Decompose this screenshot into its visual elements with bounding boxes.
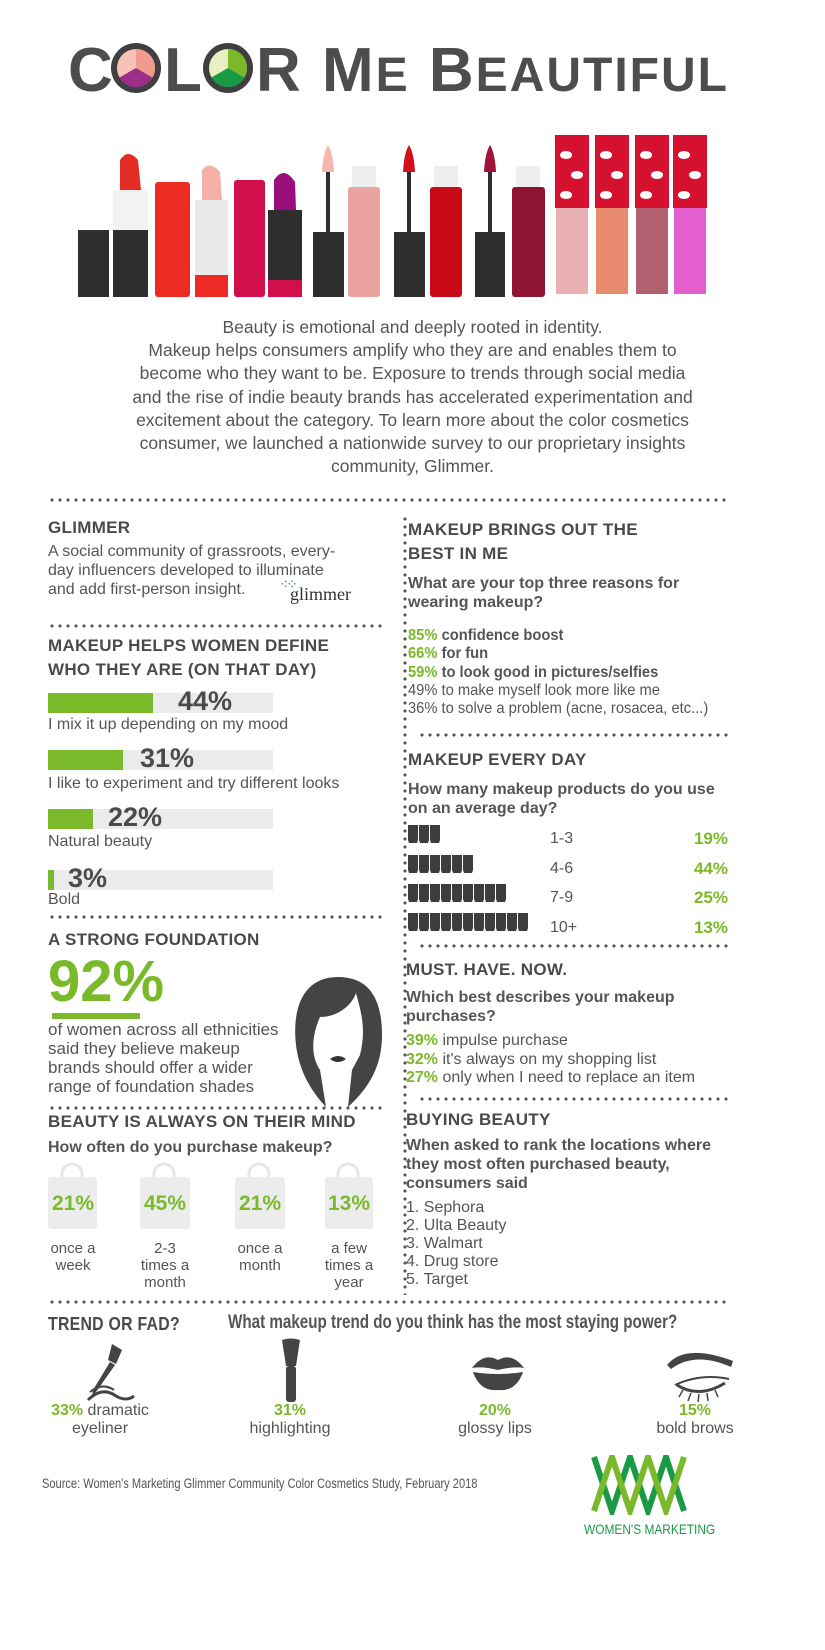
panel: best in me: What are your top three reasons for (408, 575, 679, 592)
panel: buying beauty: 1. Sephora (406, 1199, 484, 1216)
bar chart: 3% (68, 863, 107, 893)
bar chart: 31% (140, 743, 194, 773)
icon: glimmer logo (280, 576, 351, 604)
panel: best in me: 66% for fun (408, 645, 488, 662)
panel: best in me: 36% to solve a problem (acne, rosacea, etc...) (408, 700, 708, 717)
icon: shopping bags with stats: times a (141, 1257, 189, 1274)
chart: products per day: 13% (694, 918, 728, 936)
panel: buying beauty: BUYING BEAUTY (406, 1110, 551, 1129)
icon: eyeliner (87, 1344, 135, 1401)
lipstick illustration (78, 135, 707, 297)
icon: glimmer logo: glimmer (290, 584, 351, 604)
panel: best in me: 59% to look good in pictures/selfies (408, 664, 658, 681)
icon: shopping bags with stats: 21% (239, 1192, 281, 1215)
icon: shopping bags with stats: month (239, 1257, 281, 1274)
panel: strong foundation: 92% (48, 949, 164, 1014)
heading: trend or fad: What makeup trend do you think has the most staying power? (228, 1312, 677, 1333)
panel: define who they are: WHO THEY ARE (ON THAT DAY) (48, 660, 316, 679)
panel: must have now: MUST. HAVE. NOW. (406, 960, 567, 979)
icon: shopping bags with stats: week (55, 1257, 91, 1274)
panel: glimmer: GLIMMER (48, 518, 130, 537)
panel: strong foundation: said they believe makeup (48, 1039, 240, 1058)
icon: shopping bags with stats: a few (331, 1240, 367, 1257)
panel: best in me: wearing makeup? (408, 594, 543, 611)
panel: strong foundation (48, 930, 279, 1096)
panel: strong foundation: brands should offer a wider (48, 1058, 253, 1077)
trend stats: 33% dramatic (51, 1402, 149, 1419)
chart: products per day: 44% (694, 858, 728, 878)
panel: buying beauty: 2. Ulta Beauty (406, 1217, 506, 1234)
panel: makeup every day: MAKEUP EVERY DAY (408, 750, 587, 769)
panel: glimmer: and add first-person insight. (48, 581, 245, 598)
icon: shopping bags with stats: times a (325, 1257, 373, 1274)
logo: women's marketing (584, 1455, 715, 1537)
trend stats (51, 1402, 734, 1437)
icon: shopping bags with stats: 2-3 (154, 1240, 176, 1257)
panel: best in me: 85% confidence boost (408, 627, 563, 644)
panel: glimmer: A social community of grassroots, every- (48, 543, 335, 560)
logo: women's marketing: WOMEN'S MARKETING (584, 1521, 715, 1537)
icon: shopping bags with stats: once a (237, 1240, 283, 1257)
panel: buying beauty: When asked to rank the locations where (406, 1137, 711, 1154)
panel: buying beauty: they most often purchased beauty, (406, 1156, 670, 1173)
panel: must have now: 39% impulse purchase (406, 1032, 568, 1049)
icon: highlighter brush (282, 1338, 300, 1402)
panel: buying beauty: 3. Walmart (406, 1235, 483, 1252)
panel: glimmer (48, 518, 351, 604)
panel: makeup every day (408, 750, 715, 817)
panel: makeup every day: How many makeup products do you use (408, 781, 715, 798)
intro paragraph: community, Glimmer. (331, 456, 494, 476)
source note: Source: Women's Marketing Glimmer Community Color Cosmetics Study, February 2018 (42, 1476, 477, 1491)
icon: woman (295, 977, 382, 1107)
chart: products per day: 4-6 (550, 860, 573, 876)
trend stats: glossy lips (458, 1420, 532, 1437)
panel: beauty on their mind (48, 1112, 356, 1156)
icon: eye with brow (667, 1352, 733, 1402)
intro paragraph: and the rise of indie beauty brands has accelerated experimentation and (132, 387, 693, 407)
trend stats: 15% (679, 1402, 711, 1419)
icon: shopping bags with stats: 13% (328, 1192, 370, 1215)
trend stats: highlighting (250, 1420, 330, 1437)
panel: define who they are (48, 636, 329, 679)
panel: glimmer: day influencers developed to illuminate (48, 562, 324, 579)
icon: shopping bags with stats: year (334, 1274, 364, 1291)
bar chart: Bold (48, 891, 80, 908)
chart: products per day: 7-9 (550, 889, 573, 906)
panel: must have now: purchases? (406, 1008, 496, 1025)
bar chart (48, 686, 339, 908)
panel: must have now: Which best describes your makeup (406, 989, 675, 1006)
bar chart: I like to experiment and try different looks (48, 775, 339, 792)
icon: shopping bags with stats: once a (50, 1240, 96, 1257)
chart: products per day: 19% (694, 829, 728, 848)
panel: must have now (406, 960, 695, 1086)
panel: must have now: 32% it's always on my shopping list (406, 1050, 656, 1068)
panel: beauty on their mind: BEAUTY IS ALWAYS ON THEIR MIND (48, 1112, 356, 1131)
panel: strong foundation: of women across all ethnicities (48, 1020, 279, 1039)
panel: strong foundation: range of foundation shades (48, 1077, 254, 1096)
panel: best in me: MAKEUP BRINGS OUT THE (408, 520, 638, 539)
intro paragraph: excitement about the category. To learn more about the color cosmetics (136, 410, 689, 430)
panel: buying beauty (406, 1110, 711, 1288)
icon: lips (472, 1357, 524, 1390)
panel: define who they are: MAKEUP HELPS WOMEN DEFINE (48, 636, 329, 655)
trend stats: bold brows (656, 1420, 734, 1437)
heading: trend or fad (48, 1312, 677, 1334)
icon: shopping bags with stats: 21% (52, 1192, 94, 1215)
bar chart: Natural beauty (48, 833, 152, 850)
icon: glimmer logo: ⁖⁘ (280, 576, 296, 592)
panel: best in me: BEST IN ME (408, 544, 508, 563)
panel: beauty on their mind: How often do you purchase makeup? (48, 1139, 332, 1156)
heading: trend or fad: TREND OR FAD? (48, 1314, 180, 1334)
chart: products per day (408, 825, 728, 936)
intro paragraph: Makeup helps consumers amplify who they are and enables them to (148, 340, 677, 360)
icon: shopping bags with stats (48, 1162, 374, 1291)
icon: shopping bags with stats: month (144, 1274, 186, 1291)
panel: buying beauty: 4. Drug store (406, 1253, 498, 1270)
trend stats: 31% (274, 1402, 306, 1419)
panel: buying beauty: consumers said (406, 1175, 528, 1192)
bar chart: 44% (178, 686, 232, 716)
icon: shopping bags with stats: 45% (144, 1192, 186, 1215)
panel: buying beauty: 5. Target (406, 1271, 468, 1288)
panel: best in me (408, 520, 708, 717)
panel: strong foundation: A STRONG FOUNDATION (48, 930, 260, 949)
chart: products per day: 1-3 (550, 830, 573, 847)
bar chart: 22% (108, 802, 162, 832)
intro paragraph (132, 317, 693, 476)
chart: products per day: 25% (694, 888, 728, 907)
panel: must have now: 27% only when I need to replace an item (406, 1069, 695, 1086)
intro paragraph: Beauty is emotional and deeply rooted in identity. (222, 317, 603, 337)
trend stats: 20% (479, 1402, 511, 1419)
intro paragraph: consumer, we launched a nationwide survey to our proprietary insights (140, 433, 685, 453)
bar chart: I mix it up depending on my mood (48, 716, 288, 733)
panel: best in me: 49% to make myself look more like me (408, 682, 660, 699)
panel: makeup every day: on an average day? (408, 800, 557, 817)
intro paragraph: become who they want to be. Exposure to trends through social media (140, 363, 685, 383)
chart: products per day: 10+ (550, 918, 577, 936)
trend stats: eyeliner (72, 1420, 128, 1437)
